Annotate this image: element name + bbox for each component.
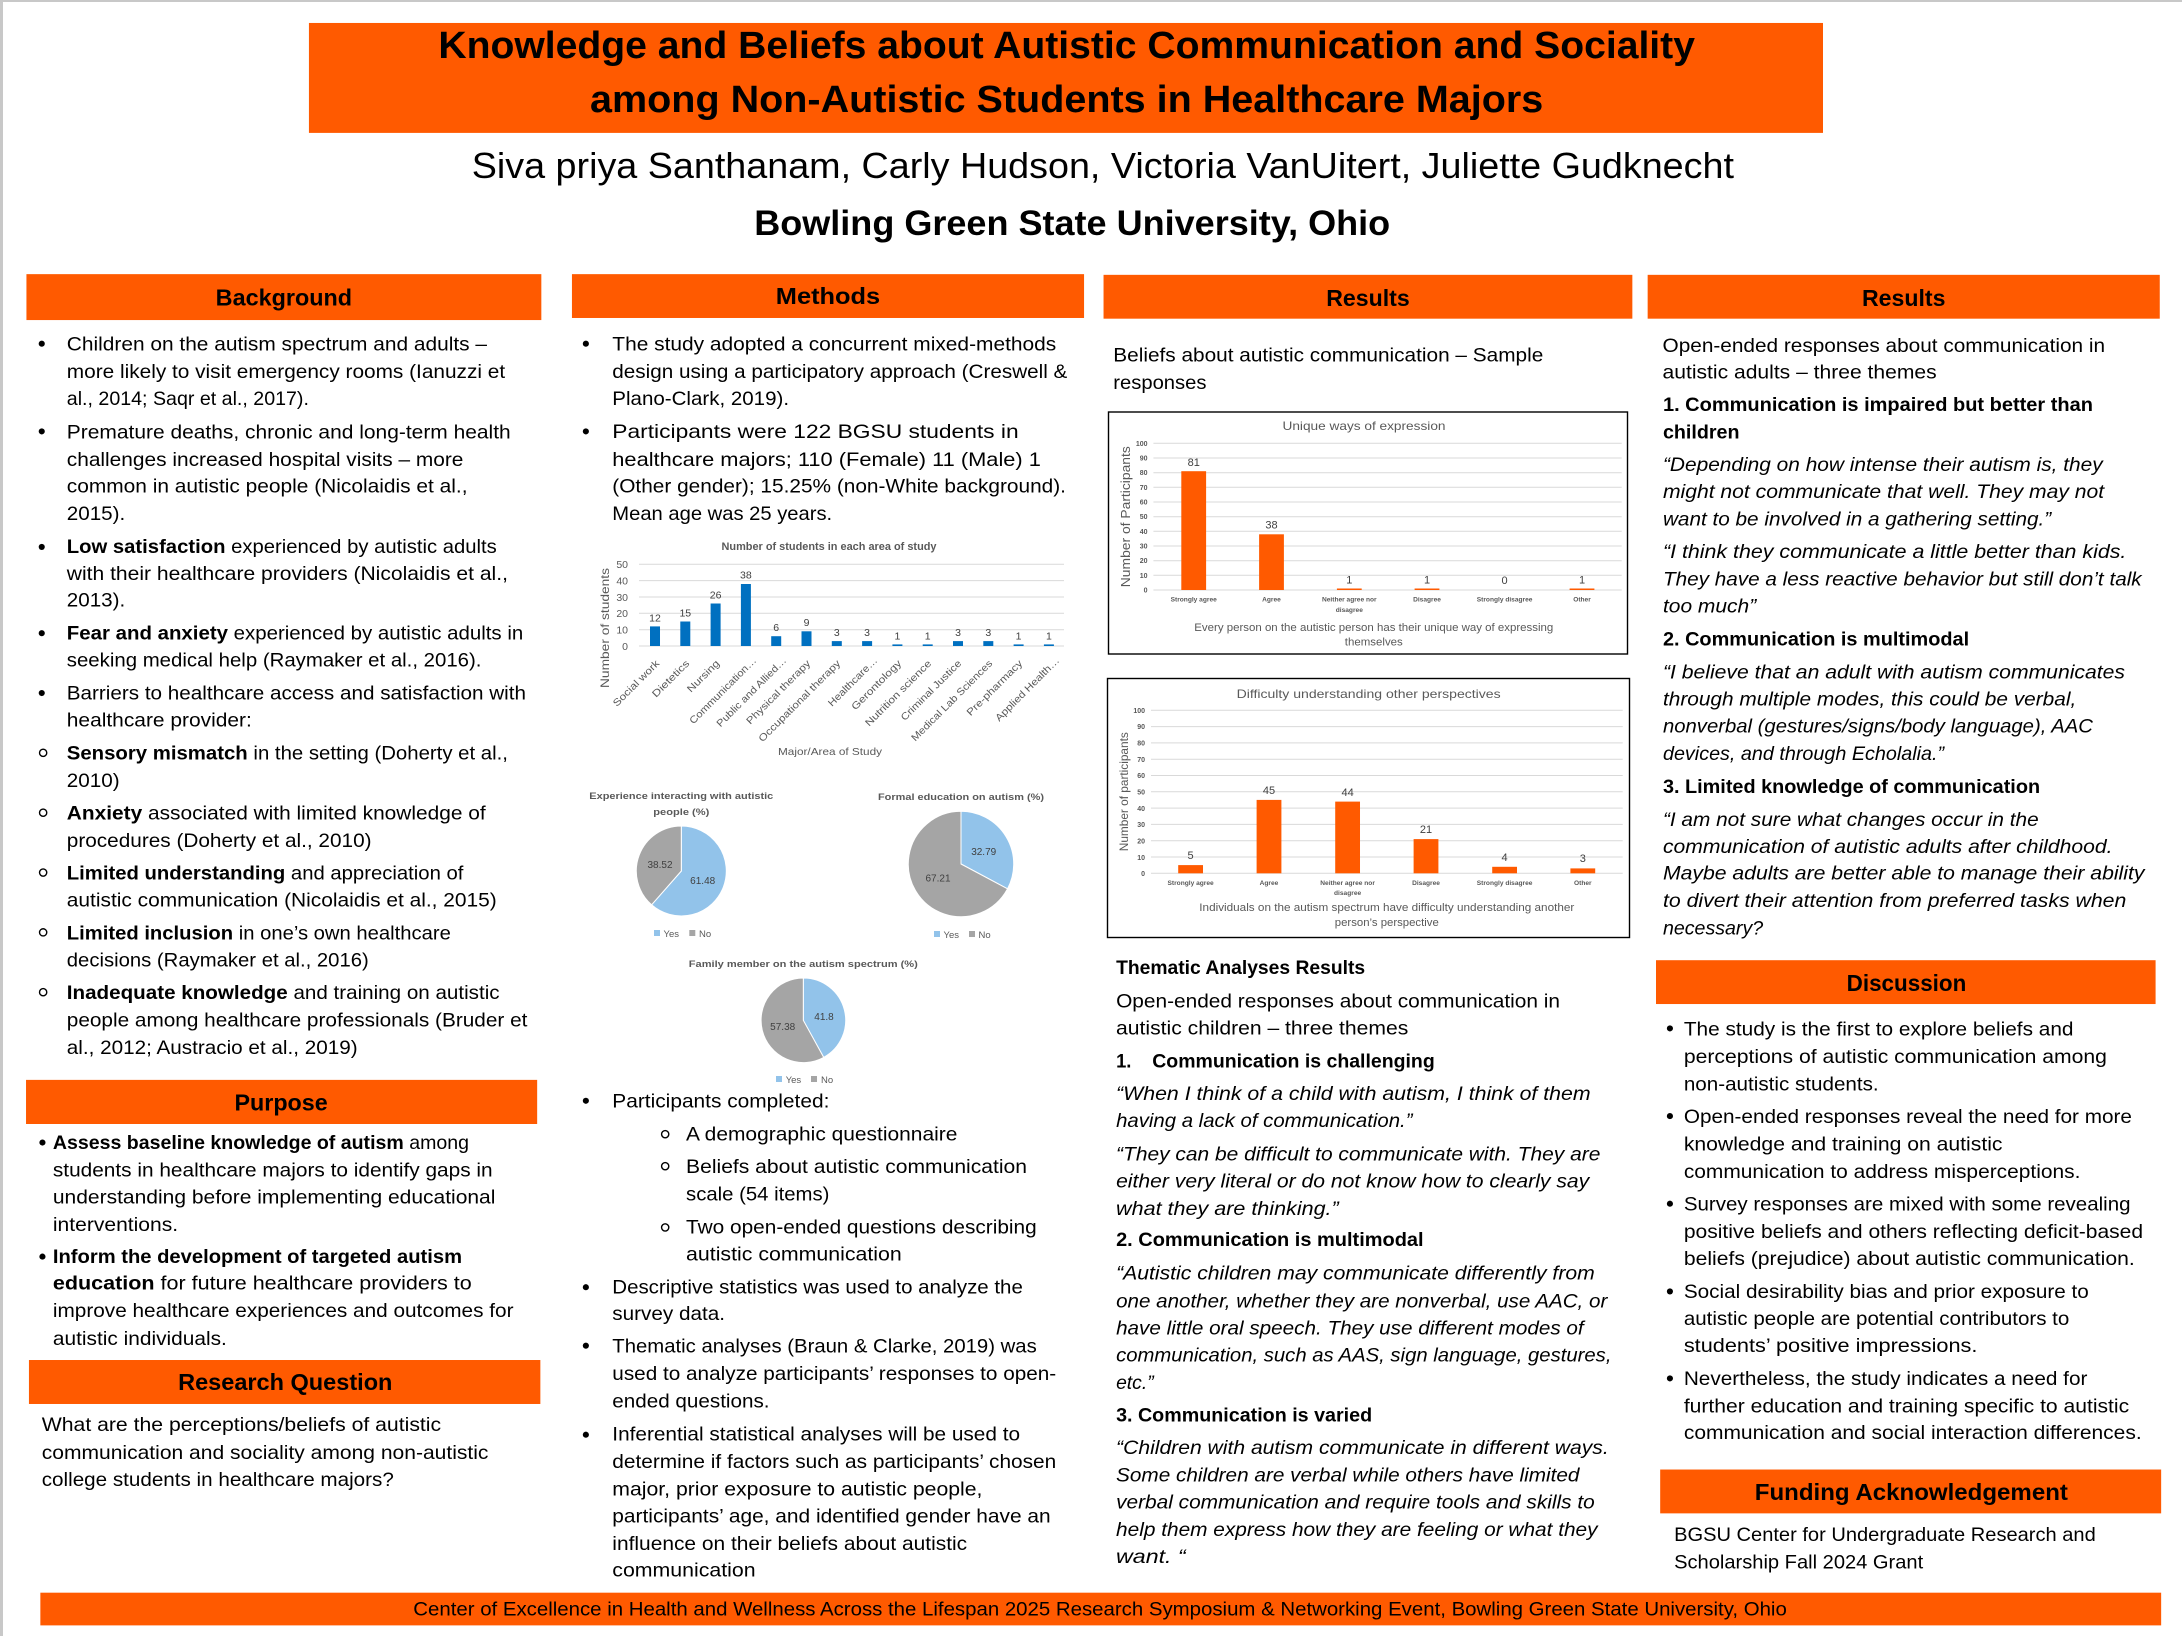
bullet list: procedure and analysis: A demographic questionnaire [686,1124,958,1146]
bar chart: difficulty understanding other perspectives: 10 [1137,855,1145,862]
bullet list: discussion points: perceptions of autistic communication among [1684,1046,2107,1068]
text block: open-ended responses about adults: Open-ended responses about communication in [1663,335,2105,357]
pie chart: experience interacting with autistic people: Yes [664,929,679,940]
heading: results [1104,275,1632,319]
bar chart: difficulty understanding other perspectives: 50 [1137,790,1145,797]
bar chart: difficulty understanding other perspectives: Neither agree nor [1320,880,1375,887]
bar chart: number of students in each area of study: 26 [710,590,722,602]
text block: open-ended responses about adults: children [1663,421,1739,443]
bullet list: study design and participants [583,333,1067,525]
text block: open-ended responses about adults: 3. Limited knowledge of communication [1663,776,2040,798]
bar chart: number of students in each area of study: Social work [611,658,663,709]
text block: thematic analyses results: want. “ [1116,1546,1187,1568]
bar chart: unique ways of expression: 100 [1136,441,1148,448]
bullet list: background points: Inadequate knowledge and training on autistic [67,982,500,1004]
text block: thematic analyses results: etc.” [1116,1372,1155,1394]
bar chart: unique ways of expression: 38 [1265,520,1278,532]
pie chart: formal education on autism: 67.21 [925,874,951,885]
panel: funding acknowledgement [1660,1470,2161,1573]
bullet list: study design and participants: Participants were 122 BGSU students in [612,421,1019,443]
text block: thematic analyses results: Some children are verbal while others have limited [1116,1465,1581,1487]
heading: methods: Methods [776,283,880,309]
bar chart: number of students in each area of study: 50 [616,559,628,571]
bar chart: unique ways of expression: Strongly disagree [1477,597,1533,604]
text block: thematic analyses results: communication, such as AAS, sign language, gestures, [1116,1345,1611,1367]
text: funding source [1674,1524,2096,1573]
bar chart: number of students in each area of study: 15 [679,608,691,620]
bar chart: unique ways of expression: Other [1573,597,1591,604]
bar chart: difficulty understanding other perspectives: person’s perspective [1335,917,1439,929]
bar chart: difficulty understanding other perspectives: Difficulty understanding other perspectives [1237,687,1501,701]
pie chart: experience interacting with autistic people [589,791,774,940]
text block: open-ended responses about adults: “I think they communicate a little better than kids. [1663,541,2126,563]
bullet list: discussion points: communication to address misperceptions. [1684,1161,2080,1183]
bullet list: study design and participants: design using a participatory approach (Creswell & [612,361,1067,383]
bullet list: procedure and analysis: participants’ age, and identified gender have an [612,1505,1051,1527]
heading: funding acknowledgement [1660,1470,2161,1513]
bullet list: study design and participants: Plano-Clark, 2019). [612,388,789,410]
text block: open-ended responses about adults: 1. Communication is impaired but better than [1663,394,2093,416]
bullet list: discussion points: Survey responses are mixed with some revealing [1684,1194,2131,1216]
bar chart: difficulty understanding other perspectives: Strongly disagree [1477,880,1533,887]
bullet list: study design and participants: The study adopted a concurrent mixed-methods [612,333,1056,355]
title banner: among Non-Autistic Students in Healthcare Majors [590,78,1543,121]
bullet list: background points: al., 2012; Austracio et al., 2019) [67,1037,358,1059]
heading: background [26,274,541,320]
text block: open-ended responses about adults: “I believe that an adult with autism communicates [1663,661,2125,683]
bar chart: number of students in each area of study: 3 [985,627,991,639]
bullet list: background points: with their healthcare providers (Nicolaidis et al., [66,563,508,585]
bar chart: difficulty understanding other perspectives: 40 [1137,806,1145,813]
bar chart: unique ways of expression: Strongly agree [1171,597,1217,604]
bar chart: unique ways of expression: 1 [1424,575,1430,587]
bar chart: difficulty understanding other perspectives: Agree [1260,880,1279,887]
bar chart: difficulty understanding other perspectives: 45 [1263,785,1275,797]
bar chart: number of students in each area of study: Applied Health… [994,655,1062,724]
bar chart: number of students in each area of study: Nursing [685,658,722,695]
bar chart: unique ways of expression: Every person on the autistic person has their unique way of expressing [1194,622,1553,634]
bar chart: number of students in each area of study: 3 [834,627,840,639]
bullet list: procedure and analysis: major, prior exposure to autistic people, [612,1479,982,1501]
bar chart: number of students in each area of study: 30 [616,592,628,604]
bullet list: procedure and analysis: scale (54 items) [686,1184,829,1206]
text block: open-ended responses about adults: through multiple modes, this could be verbal, [1663,689,2076,711]
bullet list: background points: Anxiety associated with limited knowledge of [67,803,486,825]
text block: thematic analyses results: one another, whether they are nonverbal, use AAC, or [1116,1290,1609,1312]
bar chart: difficulty understanding other perspectives: 30 [1137,822,1145,829]
panel: discussion [1656,960,2156,1444]
bar chart: unique ways of expression: 80 [1140,470,1148,477]
bar chart: number of students in each area of study: 38 [740,570,752,582]
bar chart: number of students in each area of study: Major/Area of Study [778,746,883,758]
bullet list: background points: 2010) [67,770,120,792]
text block: thematic analyses results: 1. [1116,1050,1131,1072]
bullet list: purpose points: improve healthcare experiences and outcomes for [53,1300,514,1322]
heading: research question: Research Question [178,1369,392,1395]
bullet list: discussion points: The study is the first to explore beliefs and [1684,1018,2073,1040]
pie chart: formal education on autism: Formal education on autism (%) [878,792,1044,803]
bar chart: unique ways of expression: 60 [1140,500,1148,507]
bar chart: number of students in each area of study: 1 [894,631,900,643]
bullet list: background points: Low satisfaction experienced by autistic adults [67,536,497,558]
text: research question [42,1414,489,1491]
bar chart: number of students in each area of study: Number of students in each area of study [722,541,937,553]
bullet list: background points: Barriers to healthcare access and satisfaction with [67,683,526,705]
text block: open-ended responses about adults: “I am not sure what changes occur in the [1663,809,2039,831]
bullet list: discussion points: beliefs (prejudice) about autistic communication. [1684,1248,2135,1270]
bar chart: unique ways of expression: 90 [1140,456,1148,463]
text block: thematic analyses results: “When I think of a child with autism, I think of them [1116,1083,1591,1105]
bullet list: background points: people among healthcare professionals (Bruder et [67,1009,528,1031]
bullet list: background points: healthcare provider: [67,709,252,731]
text block: thematic analyses results: have little oral speech. They use different modes of [1116,1318,1586,1340]
bar chart: number of students in each area of study: 3 [864,627,870,639]
bar chart: difficulty understanding other perspectives: 20 [1137,839,1145,846]
text: sample responses intro: responses [1113,372,1207,394]
text block: open-ended responses about adults: want to be involved in a gathering setting.” [1663,508,2053,530]
text block: thematic analyses results: having a lack of communication.” [1116,1110,1414,1132]
pie chart: family member on the autism spectrum: No [821,1075,833,1086]
heading: results [1648,275,2160,319]
bar chart: unique ways of expression: themselves [1345,637,1403,649]
heading: discussion: Discussion [1847,970,1966,996]
panel: purpose [26,1080,537,1350]
bar chart: unique ways of expression: 30 [1140,544,1148,551]
bullet list: purpose points: students in healthcare majors to identify gaps in [53,1160,493,1182]
bullet list: background points: Children on the autism spectrum and adults – [67,334,487,356]
bar chart: difficulty understanding other perspectives: 3 [1580,853,1586,865]
bullet list: procedure and analysis: Participants completed: [612,1090,829,1112]
bar chart: difficulty understanding other perspectives: 44 [1341,787,1354,799]
bar chart: number of students in each area of study: Healthcare… [826,655,880,709]
bullet list: purpose points [39,1132,514,1350]
bar chart: difficulty understanding other perspectives: Other [1574,880,1592,887]
text: sample responses intro: Beliefs about autistic communication – Sample [1113,344,1543,366]
bullet list: background points: al., 2014; Saqr et al., 2017). [67,388,309,410]
pie chart: family member on the autism spectrum: 57.38 [770,1022,796,1033]
text block: open-ended responses about adults: to divert their attention from preferred tasks when [1663,890,2126,912]
bullet list: background points: challenges increased hospital visits – more [67,449,463,471]
bar chart: number of students in each area of study: 3 [955,627,961,639]
pie chart: experience interacting with autistic people: 38.52 [647,860,673,871]
bullet list: procedure and analysis: Descriptive statistics was used to analyze the [612,1276,1023,1298]
bar chart: number of students in each area of study: Pre-pharmacy [965,658,1025,718]
bar chart: unique ways of expression: Neither agree nor [1322,597,1377,604]
bar chart: number of students in each area of study: Gerontology [850,658,904,713]
footer banner: Center of Excellence in Health and Wellness Across the Lifespan 2025 Research Symposium & Networking Event, Bowling Green State University, Ohio [413,1599,1787,1621]
bar chart: unique ways of expression: 0 [1502,575,1508,587]
bullet list: discussion points: further education and training specific to autistic [1684,1395,2129,1417]
pie chart: experience interacting with autistic people: No [699,929,711,940]
bar chart: unique ways of expression: disagree [1336,607,1363,614]
bar chart: number of students in each area of study: 1 [925,631,931,643]
bar chart: number of students in each area of study: Communication… [688,655,759,727]
bar chart: number of students in each area of study: 20 [616,608,628,620]
heading: background: Background [216,284,352,310]
bullet list: study design and participants: healthcare majors; 110 (Female) 11 (Male) 1 [612,449,1041,471]
text block: thematic analyses results: “Children with autism communicate in different ways. [1116,1437,1609,1459]
bar chart: unique ways of expression: 81 [1188,457,1200,469]
heading: results: Results [1326,285,1410,311]
bullet list: discussion points: non-autistic students. [1684,1073,1879,1095]
bullet list: procedure and analysis: survey data. [612,1303,725,1325]
bullet list: background points: 2013). [67,590,125,612]
bar chart: unique ways of expression: 0 [1144,588,1148,595]
bar chart: number of students in each area of study: Number of students [598,568,612,688]
bar chart: unique ways of expression: 10 [1140,573,1148,580]
bar chart: unique ways of expression: 1 [1579,575,1585,587]
text: research question: communication and sociality among non-autistic [42,1442,489,1464]
text block: thematic analyses results: Open-ended responses about communication in [1116,991,1560,1013]
bullet list: background points: Premature deaths, chronic and long-term health [67,421,511,443]
pie chart: family member on the autism spectrum: Yes [786,1075,801,1086]
bullet list: discussion points: knowledge and training on autistic [1684,1133,2003,1155]
bar chart: number of students in each area of study: Occupational therapy [757,658,843,745]
bar chart: difficulty understanding other perspectives: 0 [1141,871,1145,878]
pie chart: formal education on autism [878,792,1044,941]
bar chart: number of students in each area of study: 9 [804,617,810,629]
panel: results, column three [1104,275,1632,1568]
bullet list: discussion points: positive beliefs and others reflecting deficit-based [1684,1221,2143,1243]
text block: open-ended responses about adults: 2. Communication is multimodal [1663,629,1969,651]
bar chart: unique ways of expression: Unique ways of expression [1283,419,1446,433]
bullet list: background points: 2015). [67,503,125,525]
bullet list: background points: procedures (Doherty et al., 2010) [67,830,372,852]
text block: open-ended responses about adults: devices, and through Echolalia.” [1663,743,1946,765]
bullet list: discussion points: Nevertheless, the study indicates a need for [1684,1368,2088,1390]
bullet list: purpose points: autistic individuals. [53,1328,227,1350]
bar chart: number of students in each area of study [598,541,1064,758]
pie chart: family member on the autism spectrum [689,959,918,1086]
heading: methods [572,274,1084,318]
text: sample responses intro [1113,344,1543,394]
bar chart: difficulty understanding other perspectives: Individuals on the autism spectrum have difficulty understanding another [1199,902,1575,914]
text: funding source: Scholarship Fall 2024 Grant [1674,1551,1924,1573]
bullet list: purpose points: Assess baseline knowledge of autism among [53,1132,469,1154]
text block: open-ended responses about adults: nonverbal (gestures/signs/body language), AAC [1663,716,2094,738]
text block: open-ended responses about adults: Maybe adults are better able to manage their ability [1663,862,2146,884]
authors: Siva priya Santhanam, Carly Hudson, Victoria VanUitert, Juliette Gudknecht [472,146,1734,186]
bar chart: difficulty understanding other perspectives: 100 [1133,708,1145,715]
university: Bowling Green State University, Ohio [754,205,1390,243]
bullet list: background points: Fear and anxiety experienced by autistic adults in [67,623,523,645]
text block: thematic analyses results: autistic children – three themes [1116,1018,1409,1040]
pie chart: formal education on autism: Yes [944,930,959,941]
text block: thematic analyses results: “They can be difficult to communicate with. They are [1116,1144,1600,1166]
text: research question: college students in healthcare majors? [42,1469,394,1491]
bullet list: background points: decisions (Raymaker et al., 2016) [67,949,369,971]
bar chart: number of students in each area of study: 12 [649,613,661,625]
title banner: Knowledge and Beliefs about Autistic Communication and Sociality [438,24,1695,67]
title banner [309,23,1823,133]
bar chart: number of students in each area of study: 40 [616,576,628,588]
heading: funding acknowledgement: Funding Acknowledgement [1755,1479,2068,1505]
bar chart: difficulty understanding other perspectives: 4 [1502,852,1508,864]
bar chart: number of students in each area of study: Criminal Justice [899,658,964,723]
bar chart: unique ways of expression: 50 [1140,514,1148,521]
bullet list: discussion points: Open-ended responses reveal the need for more [1684,1106,2132,1128]
text block: thematic analyses results: 3. Communication is varied [1116,1405,1372,1427]
bar chart: number of students in each area of study: Medical Lab Sciences [910,658,995,744]
pie chart: experience interacting with autistic people: people (%) [653,807,709,818]
bullet list: discussion points: students’ positive impressions. [1684,1335,1977,1357]
text block: thematic analyses results: help them express how they are feeling or what they [1116,1519,1599,1541]
bar chart: difficulty understanding other perspectives [1108,679,1630,938]
text: funding source: BGSU Center for Undergraduate Research and [1674,1524,2096,1546]
text block: open-ended responses about adults: might not communicate that well. They may not [1663,481,2106,503]
pie chart: experience interacting with autistic people: Experience interacting with autistic [589,791,774,802]
bar chart: unique ways of expression [1109,412,1628,654]
bar chart: unique ways of expression: 40 [1140,529,1148,536]
bullet list: study design and participants: (Other gender); 15.25% (non-White background). [612,476,1066,498]
bar chart: unique ways of expression: Number of Participants [1118,446,1133,587]
bullet list: background points: common in autistic people (Nicolaidis et al., [67,476,468,498]
bullet list: procedure and analysis: Two open-ended questions describing [686,1216,1037,1238]
panel: methods [572,274,1084,1582]
bar chart: unique ways of expression: 20 [1140,558,1148,565]
bullet list: procedure and analysis: communication [612,1560,756,1582]
text block: thematic analyses results: either very literal or do not know how to clearly say [1116,1171,1590,1193]
bullet list: procedure and analysis: influence on their beliefs about autistic [612,1533,967,1555]
bar chart: unique ways of expression: Disagree [1413,597,1441,604]
bar chart: difficulty understanding other perspectives: Disagree [1412,880,1440,887]
bar chart: number of students in each area of study: Physical therapy [745,658,813,727]
pie chart: family member on the autism spectrum: 41.8 [814,1012,834,1023]
panel: background [26,274,541,1059]
bullet list: background points: Sensory mismatch in the setting (Doherty et al., [67,742,508,764]
bar chart: number of students in each area of study: 1 [1046,631,1052,643]
text block: thematic analyses results: what they are thinking.” [1116,1198,1340,1220]
bar chart: difficulty understanding other perspectives: Number of participants [1117,732,1131,851]
bar chart: number of students in each area of study: 6 [773,622,779,634]
bullet list: procedure and analysis: Beliefs about autistic communication [686,1156,1027,1178]
text: research question: What are the perceptions/beliefs of autistic [42,1414,441,1436]
bar chart: number of students in each area of study: 10 [616,625,628,637]
bar chart: number of students in each area of study: 0 [622,641,628,653]
text block: open-ended responses about adults: communication of autistic adults after childhood. [1663,836,2112,858]
bullet list: background points: seeking medical help (Raymaker et al., 2016). [67,650,481,672]
bar chart: unique ways of expression: 1 [1346,575,1352,587]
bar chart: unique ways of expression: 70 [1140,485,1148,492]
footer banner [40,1593,2161,1625]
bullet list: procedure and analysis: Thematic analyses (Braun & Clarke, 2019) was [612,1336,1037,1358]
panel: results, column four [1648,275,2160,939]
bar chart: difficulty understanding other perspectives: disagree [1334,890,1361,897]
pie chart: experience interacting with autistic people: 61.48 [690,876,716,887]
pie chart: formal education on autism: No [979,930,991,941]
bar chart: difficulty understanding other perspectives: 90 [1137,724,1145,731]
pie chart: formal education on autism: 32.79 [971,847,997,858]
bar chart: difficulty understanding other perspectives: 80 [1137,741,1145,748]
bullet list: background points: Limited understanding and appreciation of [67,862,464,884]
heading: results: Results [1862,285,1945,311]
bullet list: purpose points: understanding before implementing educational [53,1186,495,1208]
text block: thematic analyses results: “Autistic children may communicate differently from [1116,1262,1595,1284]
bullet list: background points: Limited inclusion in one’s own healthcare [67,922,451,944]
bullet list: procedure and analysis: used to analyze participants’ responses to open- [612,1363,1056,1385]
bullet list: discussion points [1667,1018,2143,1444]
bullet list: study design and participants: Mean age was 25 years. [612,503,832,525]
heading: purpose [26,1080,537,1124]
bullet list: procedure and analysis: determine if factors such as participants’ chosen [612,1451,1056,1473]
text block: open-ended responses about adults: They have a less reactive behavior but still don’t talk [1663,568,2143,590]
bar chart: difficulty understanding other perspectives: 5 [1188,850,1194,862]
bullet list: discussion points: Social desirability bias and prior exposure to [1684,1281,2089,1303]
bar chart: difficulty understanding other perspectives: 60 [1137,773,1145,780]
panel: research question [29,1360,540,1491]
bullet list: discussion points: autistic people are potential contributors to [1684,1308,2069,1330]
text block: open-ended responses about adults: “Depending on how intense their autism is, they [1663,454,2104,476]
text block: open-ended responses about adults [1663,335,2146,939]
bar chart: difficulty understanding other perspectives: 70 [1137,757,1145,764]
text block: thematic analyses results: 2. Communication is multimodal [1116,1229,1424,1251]
bar chart: number of students in each area of study: Public and Allied… [715,655,789,730]
heading: purpose: Purpose [234,1089,328,1115]
heading: discussion [1656,960,2156,1004]
bullet list: discussion points: communication and social interaction differences. [1684,1422,2142,1444]
bullet list: procedure and analysis: Inferential statistical analyses will be used to [612,1424,1020,1446]
bar chart: number of students in each area of study: Dietetics [650,658,692,700]
text block: open-ended responses about adults: necessary? [1663,917,1763,939]
bullet list: procedure and analysis: autistic communication [686,1243,902,1265]
text block: open-ended responses about adults: autistic adults – three themes [1663,362,1937,384]
bullet list: procedure and analysis [583,1090,1056,1582]
bar chart: unique ways of expression: Agree [1262,597,1281,604]
text block: thematic analyses results [1116,957,1611,1568]
bullet list: purpose points: interventions. [53,1214,178,1236]
text block: thematic analyses results: Thematic Analyses Results [1116,957,1365,979]
text block: open-ended responses about adults: too much” [1663,595,1758,617]
bullet list: purpose points: education for future healthcare providers to [53,1273,472,1295]
pie chart: family member on the autism spectrum: Family member on the autism spectrum (%) [689,959,918,970]
bullet list: background points: more likely to visit emergency rooms (Ianuzzi et [67,361,506,383]
bar chart: difficulty understanding other perspectives: Strongly agree [1168,880,1214,887]
bar chart: difficulty understanding other perspectives: 21 [1420,824,1432,836]
bar chart: number of students in each area of study: Nutrition science [863,658,934,729]
heading: research question [29,1360,540,1404]
bar chart: number of students in each area of study: 1 [1016,631,1022,643]
bullet list: procedure and analysis: ended questions. [612,1390,770,1412]
text block: thematic analyses results: verbal communication and require tools and skills to [1116,1491,1595,1513]
bullet list: background points [39,334,528,1059]
bullet list: purpose points: Inform the development of targeted autism [53,1246,462,1268]
bullet list: background points: autistic communication (Nicolaidis et al., 2015) [67,890,497,912]
text block: thematic analyses results: Communication is challenging [1152,1050,1435,1072]
